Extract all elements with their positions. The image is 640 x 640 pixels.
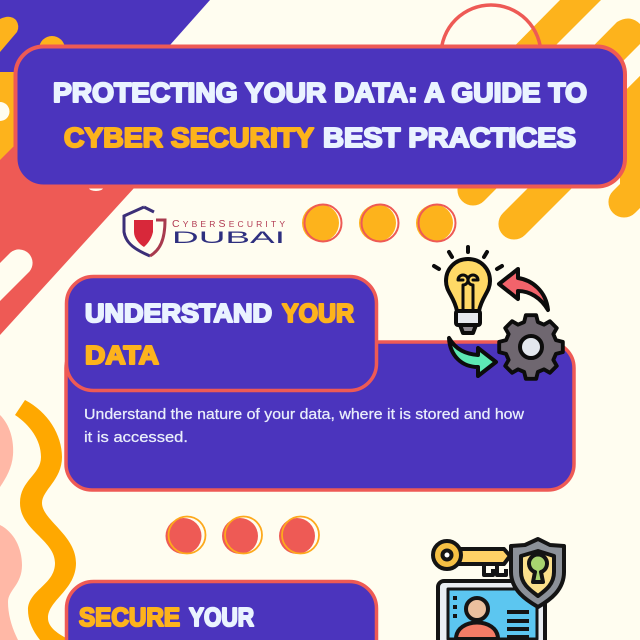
icon: key, shield and id card bbox=[433, 539, 564, 640]
shield bbox=[511, 539, 564, 607]
section 1 body panel bbox=[66, 342, 574, 490]
title panel bbox=[16, 46, 625, 186]
dots row: red bbox=[166, 516, 319, 554]
section 1 heading bbox=[66, 276, 376, 390]
decorative shapes: top left bbox=[0, 0, 210, 335]
section 1 body text: Understand the nature of your data, where it is stored and how bbox=[84, 407, 524, 423]
section 1 body panel: it is accessed. bbox=[84, 430, 188, 446]
title line 2: BEST PRACTICES bbox=[323, 122, 576, 153]
bulb bbox=[446, 259, 490, 333]
decorative shapes: top right bbox=[441, 0, 640, 240]
logo bbox=[124, 207, 285, 256]
title line 2 highlight: CYBER SECURITY bbox=[64, 122, 314, 153]
logo text: CyberSecurity: C YBER S ECURITY bbox=[172, 218, 285, 230]
heading word: your: YOUR bbox=[189, 604, 254, 632]
logo text: Dubai: DUBAI bbox=[172, 228, 285, 247]
heading word: understand: UNDERSTAND bbox=[85, 300, 272, 328]
id card bbox=[438, 581, 545, 640]
heading word: data: DATA bbox=[85, 342, 159, 370]
bulb rays bbox=[434, 247, 502, 269]
dots row: yellow bbox=[302, 204, 456, 242]
red arrow bbox=[499, 269, 548, 310]
icon: idea and gear cycle bbox=[434, 247, 563, 379]
gear bbox=[499, 315, 563, 379]
heading word: secure: SECURE bbox=[79, 604, 180, 632]
green arrow bbox=[449, 338, 496, 376]
section 2 heading bbox=[66, 582, 376, 640]
key bbox=[433, 541, 510, 575]
title line 1: PROTECTING YOUR DATA: A GUIDE TO bbox=[53, 77, 587, 108]
decorative waves: left bbox=[0, 400, 76, 640]
heading word: your: YOUR bbox=[282, 300, 354, 328]
icon: logo shield bbox=[124, 207, 165, 256]
